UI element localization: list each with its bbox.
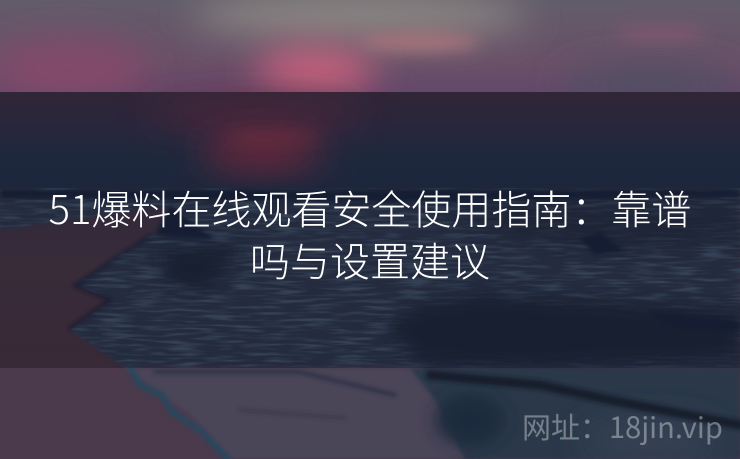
beach sand xyxy=(0,188,740,459)
title xyxy=(49,178,691,288)
wet zones xyxy=(160,205,740,368)
shore lines xyxy=(70,236,740,459)
title: 吗与设置建议 xyxy=(250,230,490,288)
watermark: 网址：18jin.vip xyxy=(522,405,723,447)
dark band overlay xyxy=(0,92,740,368)
lower beach xyxy=(0,368,230,459)
title: 51爆料在线观看安全使用指南：靠谱 xyxy=(49,178,691,236)
sky xyxy=(0,0,740,92)
sea xyxy=(0,92,740,192)
waves xyxy=(0,188,740,368)
